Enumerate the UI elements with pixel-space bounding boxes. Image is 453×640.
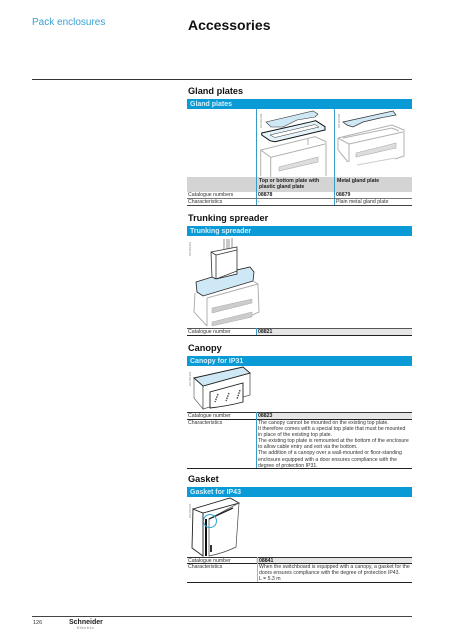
description: doors ensures compliance with the degree of protection IP43. xyxy=(259,570,400,576)
top rule xyxy=(187,328,412,329)
table: canopy xyxy=(187,412,412,469)
description: The existing top plate is remounted at the bottom of the enclosure xyxy=(258,438,409,444)
grey header row xyxy=(187,177,412,192)
icon: gasket xyxy=(192,498,240,557)
column headings: Top or bottom plate with xyxy=(259,178,319,184)
description xyxy=(259,564,410,582)
icon: trunking spreader xyxy=(194,238,260,326)
table: gasket xyxy=(187,557,412,583)
blue bar: gasket: Gasket for IP43 xyxy=(190,489,241,496)
page number: 126 xyxy=(33,620,42,626)
row: catalogue numbers: Catalogue numbers xyxy=(188,192,233,198)
page title: Accessories xyxy=(188,17,271,33)
column headings: plastic gland plate xyxy=(259,184,304,190)
blue bar: trunking spreader xyxy=(187,226,412,236)
top rule xyxy=(32,79,412,80)
bottom rule xyxy=(187,468,412,469)
divider xyxy=(256,412,257,468)
plain metal gland plate: Plain metal gland plate xyxy=(336,199,388,205)
bottom rule xyxy=(187,205,412,206)
divider xyxy=(256,328,257,335)
dash: - xyxy=(258,199,260,205)
middle rule xyxy=(187,563,412,564)
section label: Pack enclosures xyxy=(32,17,105,28)
description: It therefore comes with a special top plate that must be mounted xyxy=(258,426,405,432)
image reference code: DD383403 xyxy=(188,372,192,386)
description: to allow cable entry and exit via the bottom. xyxy=(258,444,357,450)
number: 08823 xyxy=(258,413,272,419)
description xyxy=(258,420,409,469)
label: Catalogue number xyxy=(188,329,231,335)
blue bar: canopy: Canopy for IP31 xyxy=(190,358,243,365)
number 08878: 08878 xyxy=(258,192,272,198)
grey cell xyxy=(256,557,412,563)
label: Catalogue number xyxy=(188,558,231,564)
middle rule xyxy=(187,419,412,420)
label: Characteristics xyxy=(188,420,222,426)
description: degree of protection IP31. xyxy=(258,463,318,469)
grey cell xyxy=(256,412,412,419)
blue bar: gland plates xyxy=(187,99,412,109)
description: The canopy cannot be mounted on the existing top plate. xyxy=(258,420,389,426)
column divider 1 xyxy=(256,109,257,205)
row: characteristics: Characteristics xyxy=(188,199,222,205)
label: Characteristics xyxy=(188,564,222,570)
label: Catalogue number xyxy=(188,413,231,419)
heading: gland plates: Gland plates xyxy=(188,86,243,96)
description: enclosure equipped with a door ensures compliance with the xyxy=(258,457,397,463)
image reference code: DD383401 xyxy=(188,242,192,256)
number: 08821 xyxy=(258,329,272,335)
divider xyxy=(257,557,258,582)
image reference code: DD383400 xyxy=(337,114,341,128)
image reference code: DD383399 xyxy=(259,114,263,128)
number: 08841 xyxy=(259,558,273,564)
description: When the switchboard is equipped with a canopy, a gasket for the xyxy=(259,564,410,570)
heading: canopy: Canopy xyxy=(188,343,222,353)
table: trunking spreader xyxy=(187,328,412,336)
description: in place of the existing top plate. xyxy=(258,432,332,438)
logo: Schneider Electric xyxy=(69,618,103,630)
column heading metal: Metal gland plate xyxy=(337,178,379,184)
heading: gasket: Gasket xyxy=(188,474,219,484)
icon: plastic gland plate on enclosure xyxy=(260,110,326,177)
row divider xyxy=(187,198,412,199)
blue bar: gasket xyxy=(187,487,412,497)
footer rule xyxy=(32,616,412,617)
blue bar: canopy xyxy=(187,356,412,366)
blue bar: gland plates: Gland plates xyxy=(190,101,232,108)
description: The addition of a canopy over a wall-mounted or floor-standing xyxy=(258,450,402,456)
icon: canopy xyxy=(193,366,251,410)
number 08879: 08879 xyxy=(336,192,350,198)
column headings xyxy=(259,178,319,190)
top rule xyxy=(187,412,412,413)
description: L = 5.3 m xyxy=(259,576,281,582)
logo wordmark: Schneider xyxy=(69,619,103,626)
blue bar: trunking spreader: Trunking spreader xyxy=(190,228,251,235)
icon: metal gland plate on enclosure xyxy=(338,110,404,166)
grey cell xyxy=(256,328,412,335)
column divider 2 xyxy=(334,109,335,205)
image reference code: DD383404 xyxy=(188,504,192,518)
table: gland plates xyxy=(187,99,412,206)
logo sub-mark: Electric xyxy=(77,625,94,630)
bottom rule xyxy=(187,335,412,336)
heading: trunking spreader: Trunking spreader xyxy=(188,213,268,223)
top rule xyxy=(187,557,412,558)
bottom rule xyxy=(187,582,412,583)
